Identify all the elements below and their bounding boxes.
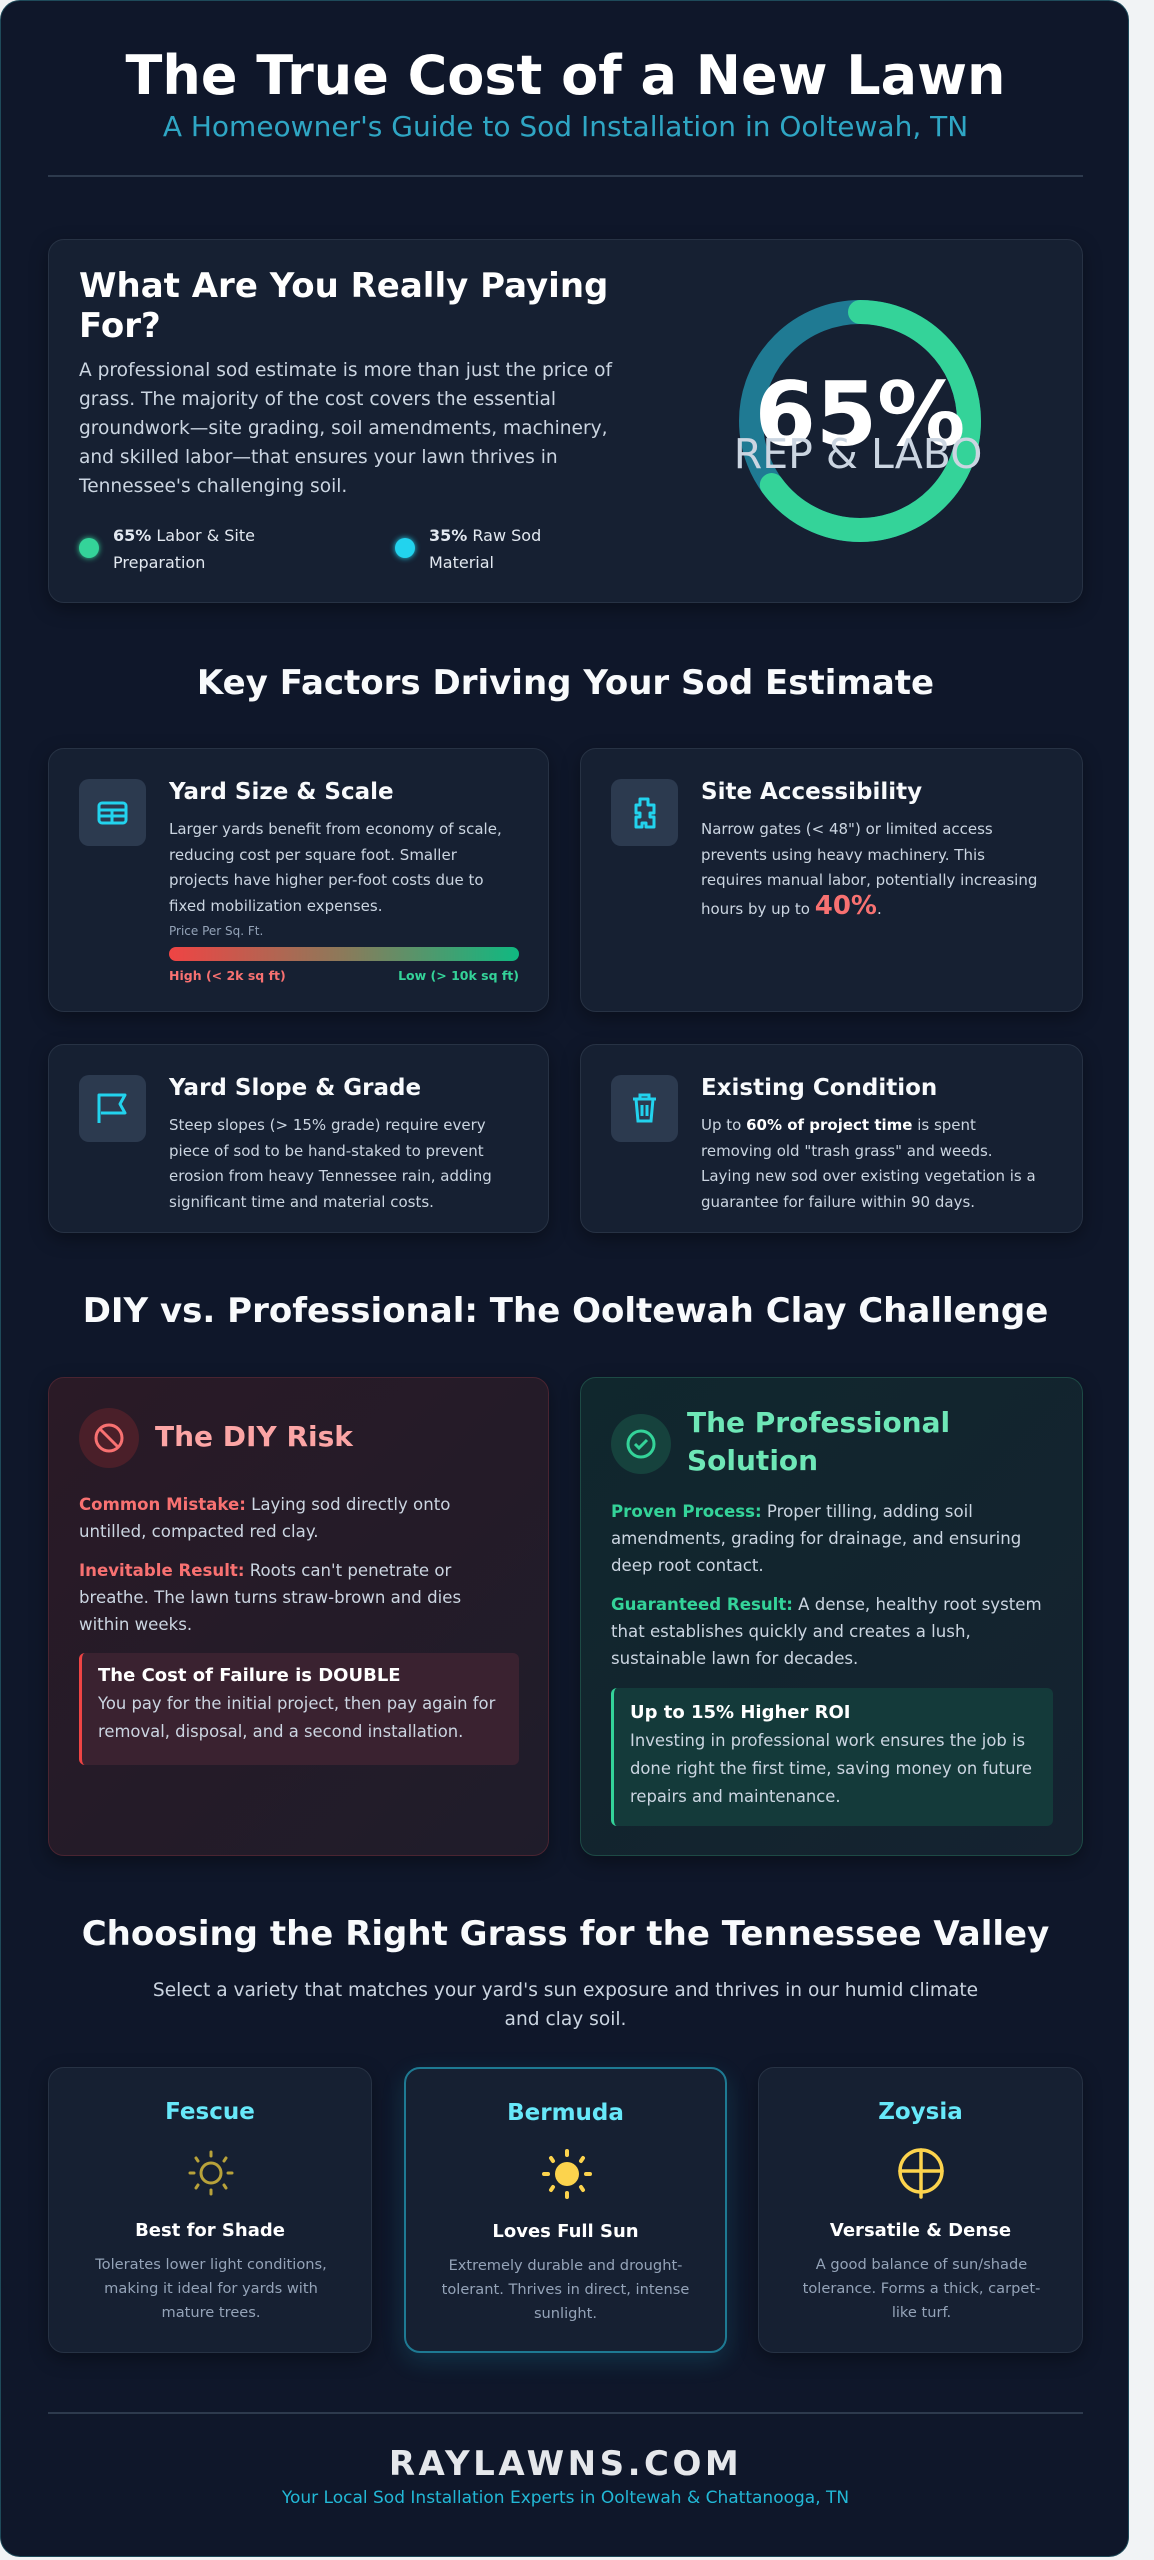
panel heading: What Are You Really Paying For? (79, 266, 608, 346)
icon: trash (611, 1075, 678, 1142)
card: yard size: Larger yards benefit from economy of scale, reducing cost per square foot. Smaller projects have higher per-foot costs due to fixed mobilization expenses. (169, 820, 502, 914)
card: bermuda: Bermuda (507, 2100, 624, 2126)
heading: key factors: Key Factors Driving Your Sod Estimate (197, 663, 934, 703)
callout: ROI (611, 1688, 1053, 1826)
icon: balance circle (898, 2148, 944, 2199)
callout: ROI: Up to 15% Higher ROI (630, 1702, 850, 1723)
bar: price per sq ft (169, 924, 519, 983)
callout: ROI: Investing in professional work ensures the job is done right the first time, saving money on future repairs and maintenance. (630, 1731, 1032, 1806)
text (79, 1495, 461, 1634)
card: fescue: Tolerates lower light conditions, making it ideal for yards with mature trees. (95, 2256, 327, 2321)
panel: what are you paying for (48, 239, 1083, 603)
card: yard size (48, 748, 549, 1012)
card: zoysia: A good balance of sun/shade tolerance. Forms a thick, carpet-like turf. (803, 2256, 1040, 2321)
panel: DIY risk (48, 1377, 549, 1856)
text: Common Mistake: Laying sod directly onto untilled, compacted red clay. (79, 1495, 450, 1541)
card: zoysia: Versatile & Dense (830, 2220, 1011, 2241)
legend: labor: 65% Labor & Site Preparation (113, 526, 255, 572)
icon: full sun (542, 2149, 592, 2199)
card: fescue: Best for Shade (135, 2220, 285, 2241)
callout: cost of failure: You pay for the initial project, then pay again for removal, disposal, and a second installation. (98, 1694, 495, 1741)
icon: flag (79, 1075, 146, 1142)
icon: dim sun (188, 2150, 234, 2196)
card: zoysia (758, 2067, 1083, 2353)
card: bermuda: Loves Full Sun (492, 2221, 639, 2242)
card: zoysia: Zoysia (878, 2099, 963, 2125)
text: Guaranteed Result: A dense, healthy root system that establishes quickly and creates a lush, sustainable lawn for decades. (611, 1595, 1042, 1668)
card: site accessibility: Site Accessibility (701, 779, 922, 805)
card: yard slope: Steep slopes (> 15% grade) require every piece of sod to be hand-staked to prevent erosion from heavy Tennessee rain, adding significant time and material costs. (169, 1116, 492, 1210)
legend: sod: 35% Raw Sod Material (429, 526, 541, 572)
bar: price per sq ft: Low (> 10k sq ft) (398, 968, 519, 983)
heading: The DIY Risk (155, 1420, 353, 1453)
card: existing condition: Existing Condition (701, 1075, 937, 1101)
card: yard slope: Yard Slope & Grade (169, 1075, 421, 1101)
bar: price per sq ft: High (< 2k sq ft) (169, 968, 286, 983)
donut chart: 65% (755, 363, 965, 466)
card: existing condition (580, 1044, 1083, 1233)
card: site accessibility: Narrow gates (< 48") or limited access prevents using heavy machinery. This requires manual labor, potentially increasing hours by up to 40%. (701, 820, 1037, 920)
title: The True Cost of a New Lawn (126, 44, 1005, 107)
card: existing condition: Up to 60% of project time is spent removing old "trash grass" and weeds. Laying new sod over existing vegetation is a guarantee for failure within 90 days. (701, 1116, 1036, 1210)
donut chart (735, 300, 985, 542)
card: bermuda (404, 2067, 727, 2353)
heading: The Professional Solution (687, 1406, 950, 1477)
subtitle: A Homeowner's Guide to Sod Installation in Ooltewah, TN (163, 110, 968, 143)
card: yard size: Yard Size & Scale (169, 779, 394, 805)
icon: table (79, 779, 146, 846)
heading: choosing grass: Choosing the Right Grass for the Tennessee Valley (82, 1914, 1049, 1954)
heading: DIY vs professional: DIY vs. Professional: The Ooltewah Clay Challenge (83, 1291, 1048, 1331)
bar: price per sq ft: Price Per Sq. Ft. (169, 924, 263, 938)
text: Inevitable Result: Roots can't penetrate or breathe. The lawn turns straw-brown and dies within weeks. (79, 1561, 461, 1634)
text: Proven Process: Proper tilling, adding soil amendments, grading for drainage, and ensuring deep root contact. (611, 1502, 1021, 1575)
footer tagline: Your Local Sod Installation Experts in Ooltewah & Chattanooga, TN (282, 2488, 849, 2508)
icon: puzzle (611, 779, 678, 846)
callout: cost of failure (79, 1653, 519, 1765)
card: site accessibility (580, 748, 1083, 1012)
card: bermuda: Extremely durable and drought-tolerant. Thrives in direct, intense sunlight. (442, 2257, 689, 2322)
text (611, 1502, 1042, 1668)
icon: ban (79, 1408, 139, 1468)
card: fescue (48, 2067, 372, 2353)
card: fescue: Fescue (165, 2099, 255, 2125)
paragraph: A professional sod estimate is more than just the price of grass. The majority of the cost covers the essential groundwork—site grading, soil amendments, machinery, and skilled labor—that ensures your lawn thrives in Tennessee's challenging soil. (79, 360, 612, 497)
footer brand: RAYLAWNS.COM (389, 2444, 742, 2484)
icon: check (611, 1414, 671, 1474)
callout: cost of failure: The Cost of Failure is DOUBLE (98, 1665, 401, 1686)
panel: professional solution (580, 1377, 1083, 1856)
card: yard slope (48, 1044, 549, 1233)
intro text: Select a variety that matches your yard's sun exposure and thrives in our humid climate and clay soil. (153, 1980, 978, 2030)
